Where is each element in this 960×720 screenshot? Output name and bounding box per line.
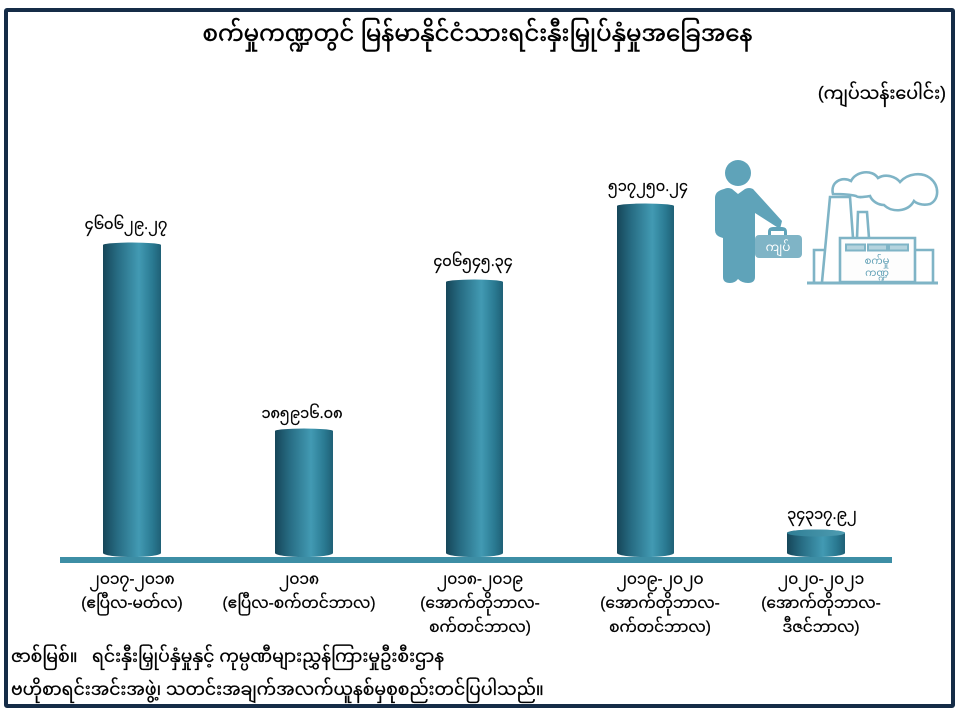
icon: factory with smoke: စက်မှု: [865, 253, 890, 269]
category label 2: (ဧပြီလ-စက်တင်ဘာလ): [223, 595, 375, 612]
category label 5: ဒီဇင်ဘာလ): [782, 619, 860, 636]
category label 4: စက်တင်ဘာလ): [609, 619, 711, 636]
source note: ဇာစ်မြစ်။ ရင်းနှီးမြှုပ်နှံမှုနှင့် ကုမ္ပဏီများညွှန်ကြားမှုဦးစီးဌာန: [11, 646, 444, 666]
category label 3: (အောက်တိုဘာလ-: [420, 595, 540, 612]
source note: ဗဟိုစာရင်းအင်းအဖွဲ့၊ သတင်းအချက်အလက်ယူနစ်မှစုစည်းတင်ပြပါသည်။: [11, 679, 544, 699]
category label 1: [81, 571, 183, 616]
category label 4: ၂၀၁၉-၂၀၂၀: [616, 571, 704, 588]
category label 1: (ဧပြီလ-မတ်လ): [81, 595, 183, 612]
value label 1: ၄၆၀၆၂၉.၂၇: [85, 217, 167, 233]
title: စက်မှုကဏ္ဍတွင် မြန်မာနိုင်ငံသားရင်းနှီးမြှုပ်နှံမှုအခြေအနေ: [203, 20, 752, 46]
bar 2018: [275, 429, 333, 557]
icon: business person with briefcase: ကျပ်: [766, 238, 790, 257]
category label 3: ၂၀၁၈-၂၀၁၉: [437, 571, 523, 588]
category label 4: (အောက်တိုဘာလ-: [600, 595, 720, 612]
icon: factory with smoke: ကဏ္ဍ: [865, 268, 889, 282]
value label 5: ၃၄၃၁၇.၉၂: [787, 507, 857, 523]
category label 5: ၂၀၂၀-၂၀၂၁: [778, 571, 864, 588]
category label 5: [761, 571, 881, 636]
category label 5: (အောက်တိုဘာလ-: [761, 595, 881, 612]
category label 4: [600, 571, 720, 636]
chart baseline: [60, 557, 892, 563]
category label 1: ၂၀၁၇-၂၀၁၈: [89, 571, 175, 588]
icon: factory with smoke: [807, 172, 938, 283]
category label 2: ၂၀၁၈: [279, 571, 319, 588]
value label 4: ၅၁၇၂၅၀.၂၄: [608, 179, 688, 195]
briefcase: [755, 235, 802, 258]
category label 2: [223, 571, 375, 616]
bar 2020-2021: [787, 530, 845, 557]
bar 2017-2018: [103, 243, 161, 557]
bar 2018-2019: [446, 280, 503, 557]
source note: [11, 644, 544, 704]
icon: business person with briefcase: [715, 160, 802, 283]
bar 2019-2020: [617, 204, 674, 557]
category label 3: စက်တင်ဘာလ): [429, 619, 531, 636]
value label 2: ၁၈၅၉၁၆.၀၈: [261, 406, 343, 422]
category label 3: [420, 571, 540, 636]
value label 3: ၄၀၆၅၄၅.၃၄: [433, 254, 513, 270]
unit label: (ကျပ်သန်းပေါင်း): [818, 83, 946, 103]
